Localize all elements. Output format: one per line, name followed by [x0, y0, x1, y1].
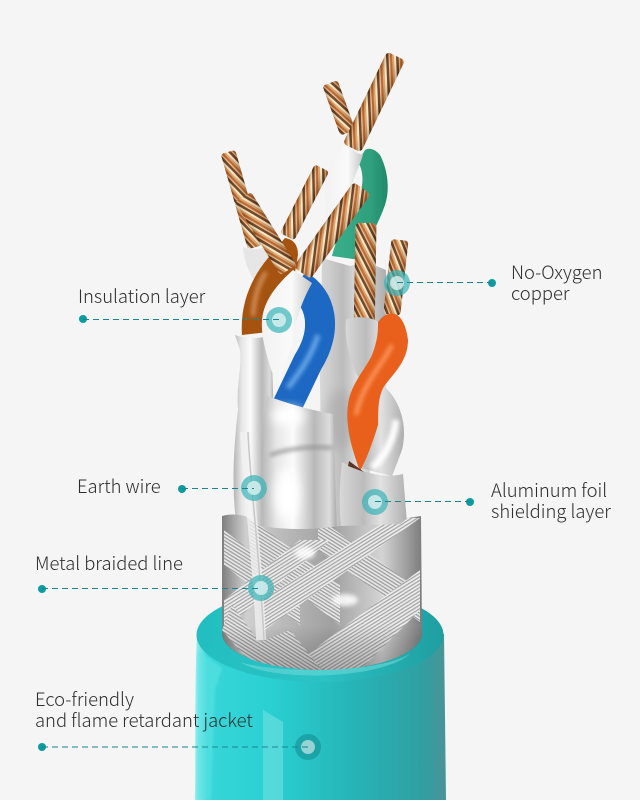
copper strand left [221, 150, 262, 249]
green wire [332, 149, 388, 260]
marker [241, 475, 267, 501]
silver foil back [320, 258, 386, 530]
blue wire [286, 285, 320, 408]
metal braid [222, 510, 422, 680]
leader line [79, 315, 279, 323]
copper strand top [343, 52, 405, 152]
label: Aluminum foil [491, 477, 607, 503]
silver foil right [340, 462, 408, 535]
callout: jacket [35, 686, 321, 760]
label: shielding layer [491, 498, 611, 524]
leader line [397, 279, 496, 287]
marker [362, 489, 388, 515]
callout: insulation layer [78, 283, 292, 333]
copper strand small top [322, 80, 355, 136]
callout: aluminum foil [362, 477, 611, 524]
leader line [178, 485, 254, 493]
orange wire [347, 314, 408, 471]
marker [384, 270, 410, 296]
brown wire [242, 238, 298, 335]
copper strand front left [235, 192, 296, 275]
white wire center [262, 270, 312, 385]
jacket body [195, 634, 446, 800]
jacket highlight [263, 710, 283, 800]
label: No-Oxygen [511, 259, 602, 285]
copper strand short [354, 223, 376, 323]
label: Insulation layer [78, 283, 206, 309]
white wire left [243, 246, 270, 286]
marker [266, 307, 292, 333]
leader line [38, 743, 308, 751]
copper strand right [383, 239, 408, 315]
callout: earth wire [77, 473, 267, 501]
jacket opening [222, 596, 422, 670]
label: Eco-friendly [35, 686, 134, 712]
callout: no-oxygen copper [384, 259, 602, 306]
leader line [38, 585, 261, 593]
silver foil center [261, 396, 337, 535]
label: Earth wire [77, 473, 161, 499]
jacket rim [196, 588, 444, 682]
marker [295, 734, 321, 760]
jacket front lip highlight [240, 654, 410, 675]
copper strand center [293, 182, 371, 279]
label: and flame retardant jacket [35, 707, 253, 733]
copper strand back [280, 164, 329, 240]
marker [248, 575, 274, 601]
cable illustration [195, 52, 446, 800]
leader line [375, 498, 474, 506]
white wire twisted right [346, 317, 404, 476]
label: copper [511, 280, 570, 306]
earth wire [245, 432, 261, 640]
white wire top sleeve [325, 143, 363, 240]
callout: metal braided line [35, 550, 274, 601]
jacket left shine [196, 650, 222, 800]
silver foil left [234, 335, 274, 535]
label: Metal braided line [35, 550, 183, 576]
